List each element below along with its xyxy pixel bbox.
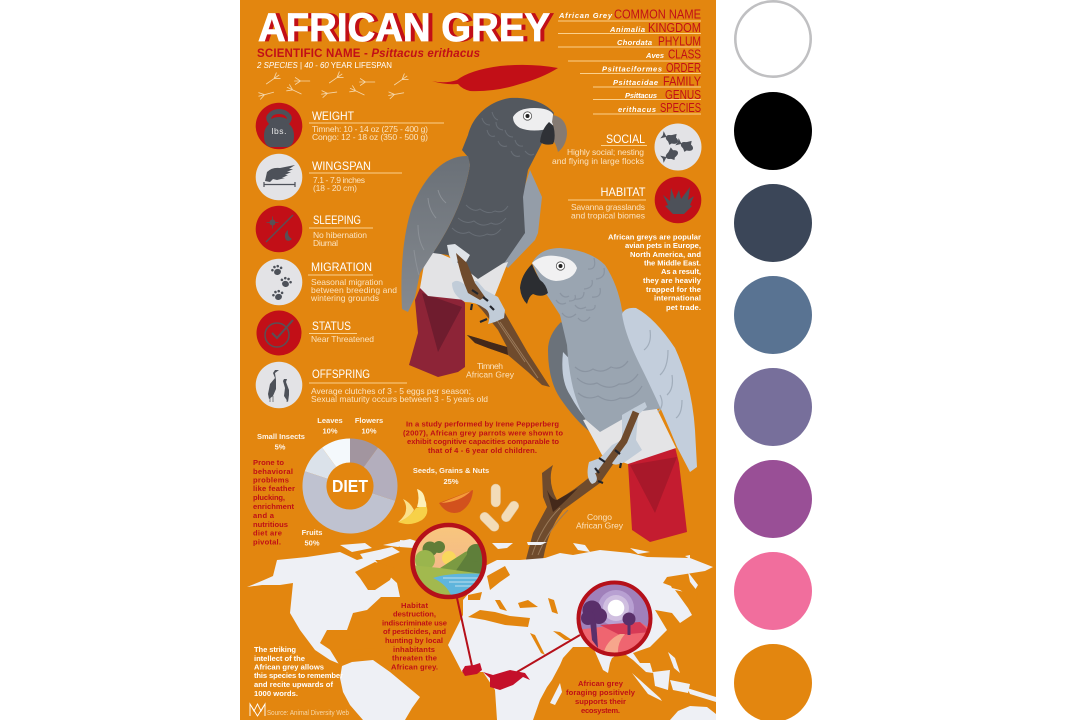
- text block: pet trade note: avian pets in Europe,: [625, 241, 701, 250]
- heading: HABITAT: [600, 185, 646, 199]
- text block: habitat destruction: indiscriminate use: [382, 618, 447, 628]
- icon: sun and moon: [256, 206, 302, 252]
- text block: behavioral problems: problems: [253, 476, 289, 484]
- heading: OFFSPRING: [312, 367, 370, 381]
- icon: bird tracks: [258, 71, 409, 99]
- taxonomy list: Psittaciformes: [602, 64, 662, 74]
- heading: SOCIAL: [606, 132, 645, 146]
- text block: cognition study: In a study performed by Irene Pepperberg: [406, 420, 559, 428]
- stat: weight: [256, 103, 444, 149]
- pointer line to West Africa: [457, 598, 472, 666]
- eye: [556, 262, 565, 270]
- foot feathers: [452, 281, 505, 324]
- stat: social: [552, 124, 702, 170]
- icon: check ring: [256, 310, 302, 356]
- taxonomy list: Psittacus: [625, 91, 657, 100]
- wing: [401, 156, 470, 312]
- details: Near Threatened: [311, 334, 374, 344]
- text block: striking intellect: this species to remember: [254, 671, 343, 680]
- text block: pet trade note: the Middle East.: [644, 258, 701, 268]
- South East Asia: [632, 652, 716, 702]
- eye patch: [532, 256, 577, 281]
- top foot feathers: [447, 244, 470, 268]
- details: No hibernation: [313, 230, 367, 240]
- range blob: Central Africa: [483, 670, 530, 690]
- Arctic Russia: [492, 542, 698, 590]
- source line: Source: Animal Diversity Web: [267, 708, 349, 717]
- label: Timneh African Grey: African Grey: [466, 370, 515, 380]
- dark wing: [548, 322, 600, 432]
- text block: behavioral problems: enrichment: [253, 502, 294, 511]
- details: (18 - 20 cm): [313, 183, 357, 193]
- colour palette swatches: [734, 1, 812, 720]
- text block: striking intellect: 1000 words.: [254, 689, 298, 698]
- text block: foraging ecosystem: ecosystem.: [581, 706, 620, 715]
- text block: habitat destruction: destruction,: [393, 610, 436, 618]
- text block: behavioral problems: diet are: [253, 528, 282, 538]
- details: Congo: 12 - 18 oz (350 - 500 g): [312, 132, 428, 142]
- icon: peanuts: [478, 484, 521, 533]
- species and lifespan: 2 SPECIES | 40 - 60 YEAR LIFESPAN: [256, 60, 392, 70]
- text block: cognition study: that of 4 - 6 year old children.: [428, 446, 537, 455]
- pointer line to Central Africa: [517, 635, 580, 672]
- diet labels: Fruits: [302, 528, 322, 537]
- icon: two herons: [256, 362, 302, 408]
- panel: orange poster background: [240, 0, 716, 720]
- text block: pet trade note: North America, and: [630, 250, 701, 259]
- details: Timneh: 10 - 14 oz (275 - 400 g): [312, 124, 428, 134]
- details: Average clutches of 3 - 5 eggs per season;: [311, 386, 471, 396]
- text block: behavioral problems: plucking,: [253, 493, 285, 502]
- text block: foraging ecosystem: supports their: [575, 697, 626, 706]
- text block: behavioral problems: behavioral: [253, 467, 293, 476]
- far wing: [500, 170, 542, 268]
- icon: three fish: [654, 124, 702, 170]
- text block: habitat destruction: of pesticides, and: [383, 627, 446, 636]
- details: Savanna grasslands: [571, 202, 645, 212]
- taxonomy list: erithacus: [618, 105, 656, 114]
- text block: pet trade note: As a result,: [661, 267, 701, 276]
- icon: logo: [250, 704, 265, 716]
- map seas: [324, 562, 698, 666]
- stat: wingspan: [256, 154, 402, 200]
- beak: [520, 264, 548, 304]
- Madagascar: [550, 683, 562, 705]
- scientific name: SCIENTIFIC NAME - Psittacus erithacus: [257, 48, 480, 60]
- icon: kettlebell: lbs.: [272, 126, 286, 136]
- taxonomy list: KINGDOM: [648, 21, 701, 35]
- white belly: [583, 405, 676, 464]
- taxonomy list: [558, 8, 702, 115]
- text block: striking intellect: and recite upwards of: [254, 680, 333, 689]
- diet donut chart: [302, 438, 398, 534]
- label: Timneh African Grey: Timneh: [477, 361, 503, 371]
- text block: cognition study: (2007), African grey parrots were shown to: [403, 428, 563, 438]
- text block: pet trade note: international: [654, 294, 701, 302]
- diet labels: Leaves: [317, 416, 343, 425]
- taxonomy list: SPECIES: [660, 101, 701, 115]
- diet labels: Flowers: [355, 416, 383, 425]
- details: Highly social; nesting: [567, 147, 644, 157]
- title: AFRICAN GREY: [258, 6, 550, 50]
- beak: [540, 122, 556, 145]
- stat: habitat: [568, 177, 701, 223]
- range blob: West Africa: [462, 663, 482, 676]
- heading: STATUS: [312, 319, 351, 333]
- stat: offspring: [256, 362, 488, 408]
- diet labels: 50%: [304, 538, 320, 548]
- text block: habitat destruction: African grey.: [391, 662, 438, 672]
- foot feathers: [588, 402, 647, 484]
- diet labels: 10%: [322, 426, 338, 436]
- scallop feathers: [556, 258, 642, 401]
- taxonomy list: CLASS: [668, 48, 701, 62]
- details: Seasonal migration: [311, 277, 383, 287]
- text block: behavioral problems: nutritious: [253, 520, 288, 529]
- Australia: [670, 706, 716, 720]
- icon: savanna plant: [655, 177, 701, 223]
- stat: status: [256, 310, 374, 356]
- eye: [523, 112, 532, 120]
- text block: foraging ecosystem: African grey: [578, 679, 624, 688]
- tail: [409, 288, 465, 377]
- taxonomy list: Psittacidae: [613, 78, 658, 87]
- Arctic islands: [340, 539, 419, 560]
- heading: WEIGHT: [312, 109, 355, 123]
- branch: [456, 253, 550, 387]
- text block: pet trade note: they are heavily: [643, 276, 702, 285]
- landscape circle: [410, 523, 490, 600]
- heading: MIGRATION: [311, 260, 372, 274]
- details: wintering grounds: [310, 293, 379, 303]
- white belly: [420, 248, 508, 300]
- text block: habitat destruction: threaten the: [392, 654, 437, 662]
- label: Congo African Grey: Congo: [587, 512, 612, 522]
- text block: striking intellect: The striking: [254, 645, 296, 654]
- text block: striking intellect: intellect of the: [254, 654, 305, 663]
- details: Sexual maturity occurs between 3 - 5 years old: [311, 394, 488, 404]
- text block: habitat destruction: inhabitants: [393, 645, 435, 654]
- scallop feathers: [452, 112, 534, 236]
- text block: pet trade note: pet trade.: [666, 303, 701, 312]
- North America: [247, 552, 400, 665]
- diet labels: 25%: [443, 477, 459, 486]
- taxonomy list: FAMILY: [663, 74, 702, 88]
- diet labels: 10%: [361, 426, 377, 436]
- text block: cognition study: exhibit cognitive capacities comparable to: [407, 437, 559, 446]
- wing: [622, 308, 697, 472]
- icon: red feather: [432, 65, 558, 91]
- parrot: Congo African grey: [520, 248, 697, 563]
- icon: banana: [398, 489, 427, 524]
- taxonomy list: GENUS: [665, 88, 701, 102]
- text block: striking intellect: African grey allows: [254, 662, 324, 672]
- eye patch: [513, 108, 553, 130]
- infographic canvas: [240, 0, 812, 720]
- text block: behavioral problems: Prone to: [253, 458, 284, 467]
- red tail: [628, 447, 687, 542]
- diet labels: Seeds, Grains & Nuts: [413, 466, 489, 475]
- body: [532, 248, 664, 432]
- icon: orange slice: [439, 490, 473, 513]
- text block: foraging ecosystem: foraging positively: [566, 688, 636, 697]
- heading: WINGSPAN: [312, 159, 371, 173]
- diet labels: [257, 416, 489, 548]
- text block: habitat destruction: hunting by local: [385, 636, 443, 645]
- stat: sleeping: [256, 206, 373, 252]
- body: [433, 98, 554, 279]
- diet labels: Small Insects: [257, 432, 305, 441]
- details: between breeding and: [311, 285, 397, 295]
- diet labels: 5%: [275, 442, 286, 452]
- details: 7.1 - 7.9 inches: [313, 175, 365, 185]
- donut centre label: DIET: [332, 476, 368, 496]
- text block: behavioral problems: like feather: [253, 484, 295, 493]
- world map: [247, 539, 716, 720]
- details: Diurnal: [313, 238, 338, 248]
- details: and flying in large flocks: [552, 156, 644, 166]
- label: Congo African Grey: African Grey: [576, 520, 624, 530]
- text block: behavioral problems: and a: [253, 511, 275, 520]
- icon: wing and ruler: [256, 154, 302, 200]
- taxonomy list: African Grey: [558, 11, 613, 20]
- wing feather marks: [414, 190, 446, 275]
- taxonomy list: Animalia: [609, 25, 645, 34]
- icon: kettlebell: [256, 103, 302, 149]
- taxonomy list: ORDER: [666, 61, 701, 75]
- South America: [340, 660, 420, 720]
- text block: pet trade note: trapped for the: [646, 285, 701, 294]
- Eurasia and Africa: [448, 550, 713, 720]
- details: and tropical biomes: [571, 210, 645, 220]
- taxonomy list: Chordata: [617, 38, 652, 47]
- taxonomy list: PHYLUM: [658, 34, 701, 48]
- title: AFRICAN GREY: [262, 6, 554, 50]
- text block: habitat destruction: Habitat: [401, 601, 428, 610]
- parrot: Timneh African grey: [401, 98, 567, 387]
- foraging circle: [577, 581, 655, 660]
- stat: migration: [256, 259, 397, 305]
- icon: paw prints: [256, 259, 302, 305]
- taxonomy list: COMMON NAME: [614, 8, 701, 22]
- heading: SLEEPING: [313, 213, 361, 227]
- text block: behavioral problems: pivotal.: [253, 538, 281, 546]
- branch: [525, 410, 638, 563]
- text block: pet trade note: African greys are popular: [608, 232, 701, 242]
- taxonomy list: Aves: [645, 51, 664, 60]
